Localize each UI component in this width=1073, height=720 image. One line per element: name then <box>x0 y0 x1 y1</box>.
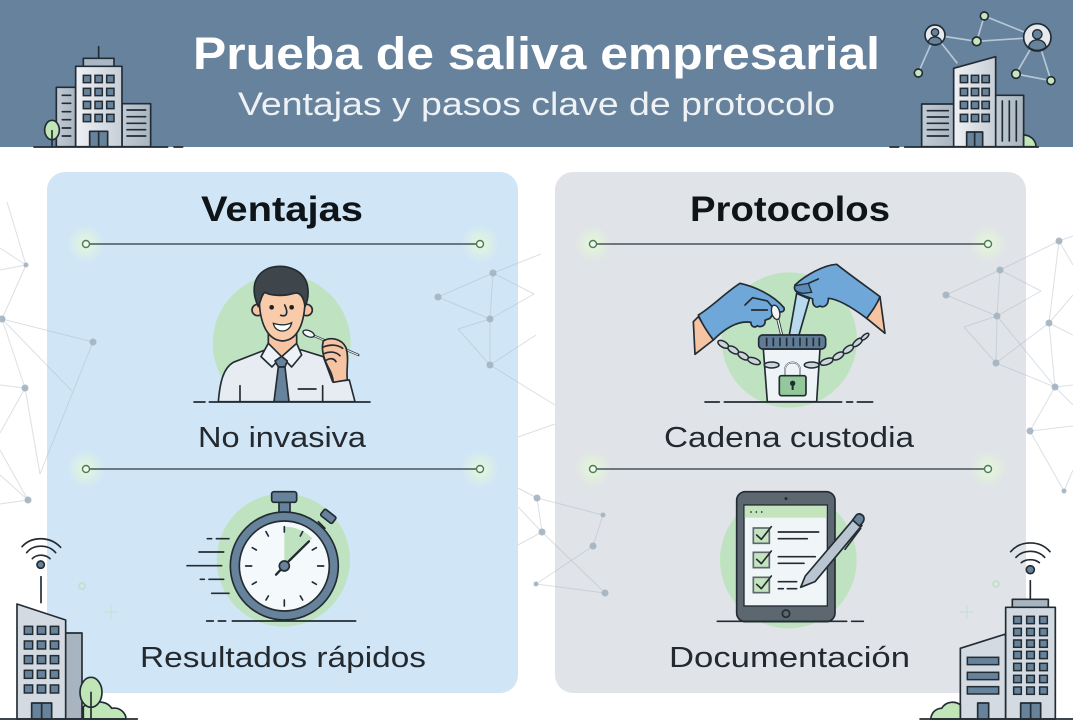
icon: person node small <box>925 25 945 45</box>
divider middle <box>574 450 1007 488</box>
icon: bottom right building with antenna <box>920 543 1073 719</box>
icon: stopwatch <box>187 492 356 627</box>
network pattern: centre bottom <box>518 488 608 596</box>
icon: tablet checklist with pen <box>717 492 864 628</box>
panel: Protocolos <box>574 190 1007 674</box>
icon: bottom left building with antenna <box>0 539 137 719</box>
divider top <box>574 225 1007 263</box>
heading: Protocolos: Protocolos <box>690 190 890 229</box>
header banner <box>0 0 1073 147</box>
panel: Protocolos background <box>555 172 1026 693</box>
decorative sparkle left <box>79 583 118 619</box>
network pattern: centre top <box>434 254 555 437</box>
decorative sparkle right <box>960 581 999 619</box>
label: Documentación: Documentación <box>669 642 910 674</box>
divider top <box>67 225 499 263</box>
icon: man with saliva swab <box>194 266 370 412</box>
panel: Ventajas background <box>47 172 518 693</box>
title: Prueba de saliva empresarial <box>193 28 880 79</box>
divider middle <box>67 450 499 488</box>
panel: Ventajas <box>67 190 499 674</box>
icon: person node large <box>1024 24 1051 51</box>
network pattern: left <box>0 202 96 504</box>
subtitle: Ventajas y pasos clave de protocolo <box>238 86 835 122</box>
network pattern: right <box>942 236 1073 494</box>
icon: gloved hands, sample jar with chain and padlock <box>693 264 885 408</box>
chain <box>717 332 870 368</box>
heading: Ventajas: Ventajas <box>201 190 363 229</box>
label: Cadena custodia: Cadena custodia <box>664 422 915 454</box>
icon: header left buildings <box>34 47 183 147</box>
label: No invasiva: No invasiva <box>198 422 367 454</box>
icon: header right buildings with people network <box>890 12 1055 147</box>
label: Resultados rápidos: Resultados rápidos <box>140 642 426 674</box>
